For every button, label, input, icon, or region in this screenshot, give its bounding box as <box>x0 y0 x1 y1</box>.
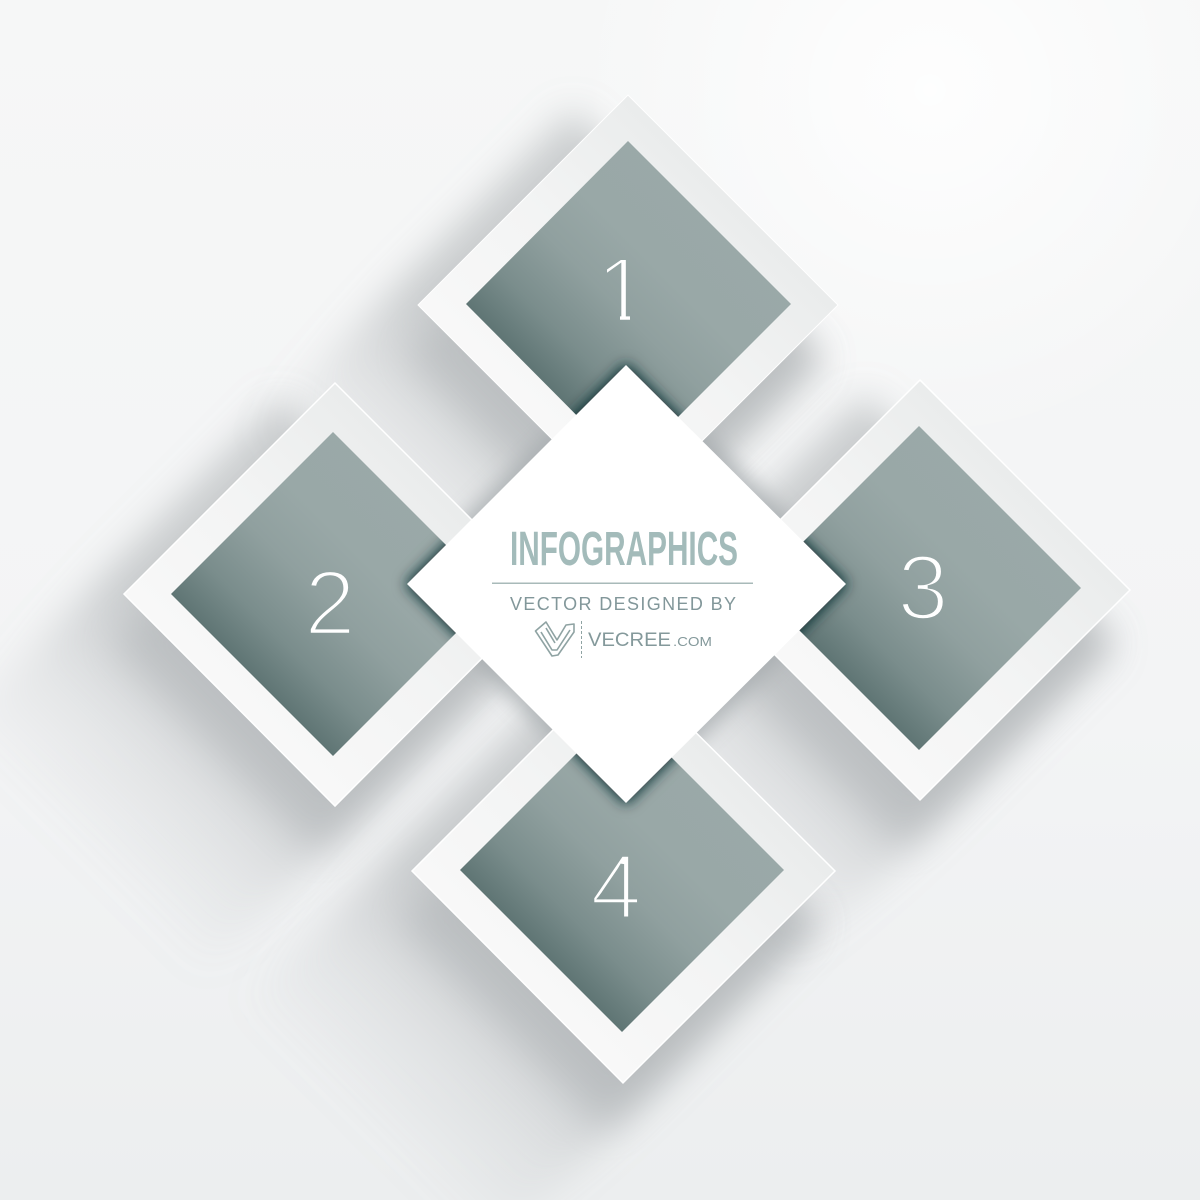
panel 3: frame <box>710 380 1130 800</box>
icon: vecree logo <box>536 622 574 656</box>
logo wordmark: VECREE <box>588 629 671 651</box>
center shadow on inner diamonds <box>405 363 848 805</box>
panel 4: inner diamond <box>460 708 784 1032</box>
number 1: 1 <box>596 240 648 342</box>
number 3: 3 <box>897 537 949 639</box>
panel 2: inner diamond <box>171 432 495 756</box>
panel 1: inner diamond <box>466 141 791 467</box>
divider line <box>492 582 753 584</box>
number 2: 2 <box>304 552 356 654</box>
logo separator <box>580 621 582 658</box>
center panel <box>407 365 846 803</box>
panel 4: frame <box>412 660 835 1083</box>
logo wordmark: .COM <box>673 635 712 649</box>
title: INFOGRAPHICS <box>510 523 738 576</box>
panel 1: frame <box>418 95 838 515</box>
panel 3: inner diamond <box>757 426 1081 750</box>
number 4: 4 <box>590 836 642 938</box>
panel 2: frame <box>124 383 546 806</box>
subtitle: VECTOR DESIGNED BY <box>510 594 736 614</box>
logo wordmark <box>588 629 712 651</box>
